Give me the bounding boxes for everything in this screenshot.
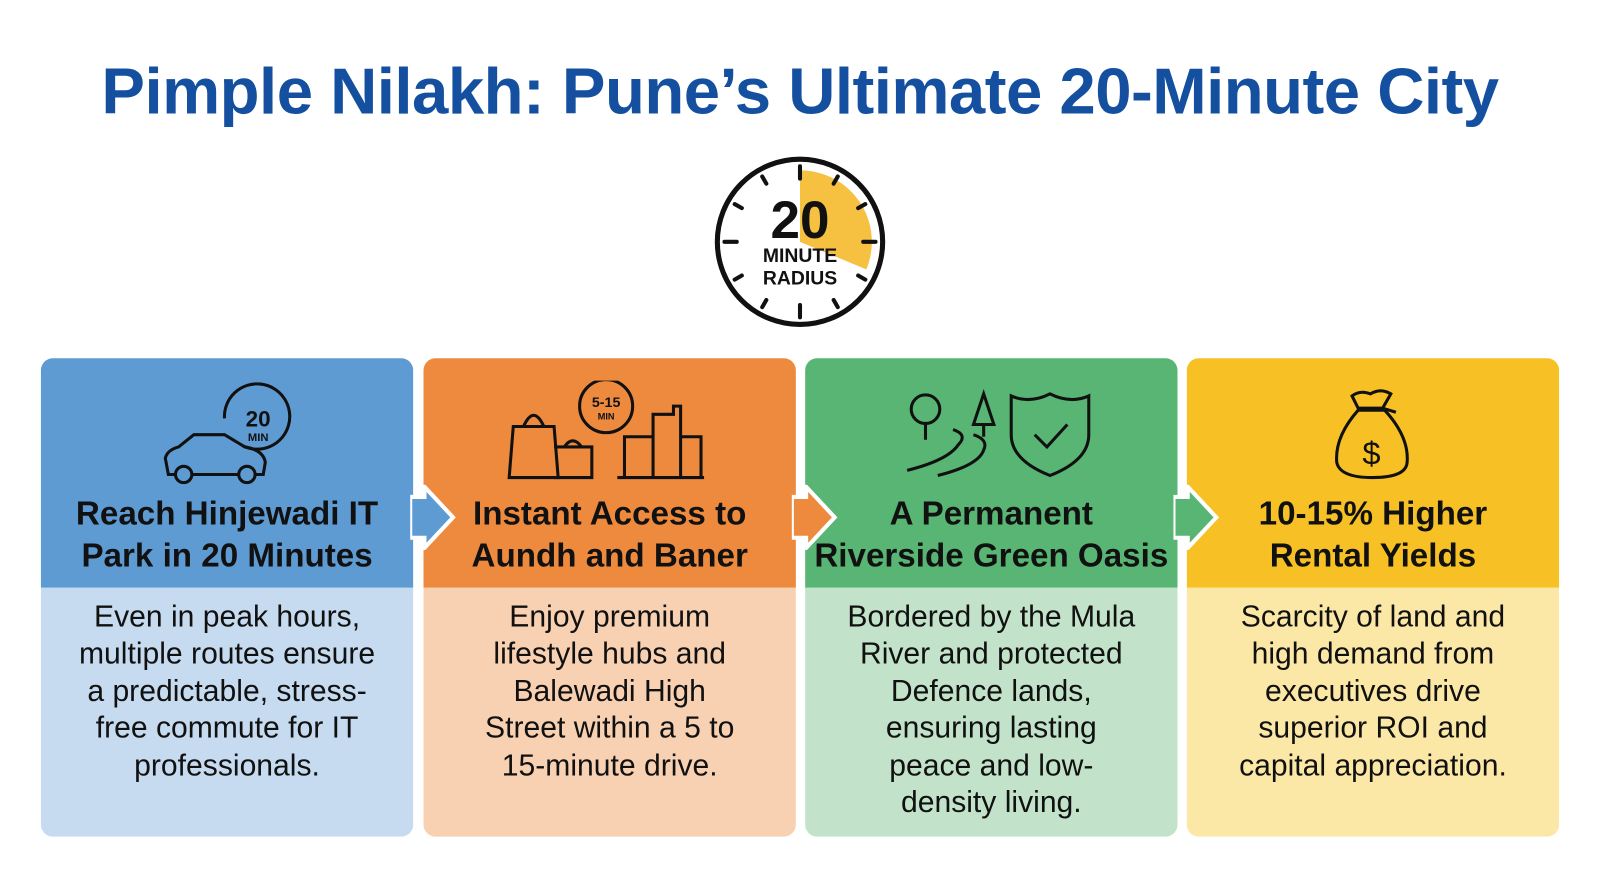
text <box>1239 600 1507 782</box>
icon: shopping and buildings: MIN <box>598 411 615 421</box>
text: Scarcity of land and <box>1241 600 1505 634</box>
arrow 2 <box>792 484 838 550</box>
panel: Hinjewadi <box>40 358 414 837</box>
text: ensuring lasting <box>886 711 1097 745</box>
text: Street within a 5 to <box>485 711 734 745</box>
text: professionals. <box>134 749 320 782</box>
heading: Rental Yields <box>1270 537 1476 573</box>
heading: A Permanent <box>890 495 1093 532</box>
text: River and protected <box>860 637 1123 671</box>
text: Balewadi High <box>513 674 706 708</box>
text <box>847 600 1136 819</box>
heading: Park in 20 Minutes <box>81 537 373 573</box>
panel: Rental Yields <box>1186 358 1560 837</box>
text: density living. <box>901 786 1082 819</box>
text: executives drive <box>1265 674 1481 708</box>
text: multiple routes ensure <box>79 637 375 671</box>
text: Even in peak hours, <box>94 600 360 634</box>
title: Pimple Nilakh: Pune’s Ultimate 20-Minute City <box>101 54 1499 128</box>
icon: money bag <box>1335 389 1409 480</box>
text: high demand from <box>1252 637 1494 671</box>
text: Defence lands, <box>891 674 1092 708</box>
icon: car with timer: MIN <box>248 432 268 444</box>
heading: Riverside Green Oasis <box>814 537 1168 573</box>
arrow 1 <box>410 484 456 550</box>
heading: Aundh and Baner <box>472 537 748 573</box>
icon: shopping and buildings <box>508 380 704 480</box>
text: 15-minute drive. <box>502 749 718 782</box>
icon: car with timer <box>164 382 292 484</box>
icon: shopping and buildings: 5-15 <box>592 395 620 411</box>
icon: 20 minute radius clock: MINUTE <box>763 245 837 267</box>
arrow 3 <box>1173 484 1219 550</box>
heading: 10-15% Higher <box>1259 495 1487 532</box>
panel: Green Oasis <box>805 358 1178 837</box>
text: peace and low- <box>889 749 1093 782</box>
text: free commute for IT <box>96 711 358 745</box>
text: lifestyle hubs and <box>493 637 726 671</box>
heading <box>1259 495 1487 573</box>
icon: car with timer: 20 <box>246 407 271 432</box>
heading <box>76 495 378 573</box>
text <box>79 600 375 782</box>
icon: 20 minute radius clock: RADIUS <box>763 268 837 290</box>
heading <box>814 495 1168 573</box>
text: a predictable, stress- <box>87 674 367 708</box>
text <box>485 600 734 782</box>
heading: Reach Hinjewadi IT <box>76 495 378 532</box>
icon: 20 minute radius clock <box>714 156 886 327</box>
text: Bordered by the Mula <box>847 600 1135 634</box>
text: capital appreciation. <box>1239 749 1507 782</box>
icon: money bag: $ <box>1362 434 1380 471</box>
text: superior ROI and <box>1258 711 1488 745</box>
panel: Aundh and Baner <box>424 358 796 837</box>
heading <box>472 495 748 573</box>
icon: 20 minute radius clock: 20 <box>770 191 830 250</box>
heading: Instant Access to <box>473 495 746 532</box>
text: Enjoy premium <box>509 600 710 634</box>
icon: trees river shield <box>906 389 1090 478</box>
